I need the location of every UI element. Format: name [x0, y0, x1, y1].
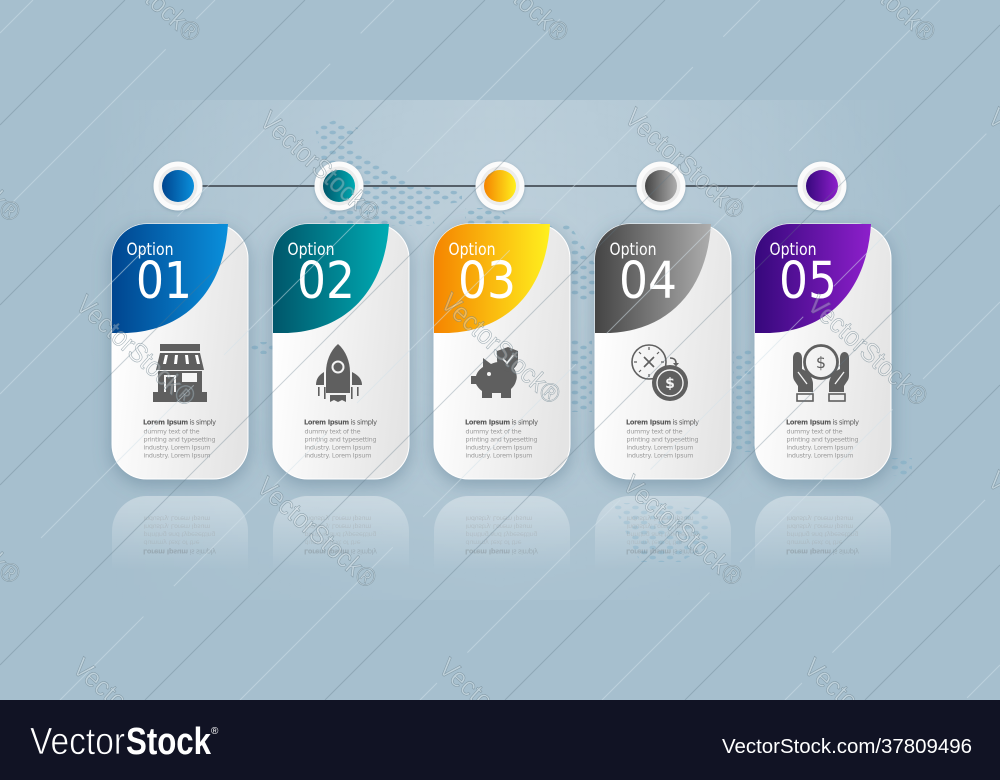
header: option 03 — [434, 224, 550, 333]
panel: option 04 — [595, 224, 731, 479]
text: option 01: printing and typesetting — [144, 436, 216, 444]
footer logo: Stock — [126, 721, 212, 763]
reflected text: printing and typesetting — [144, 530, 216, 538]
text: option 03: Lorem Ipsum is simply — [465, 418, 538, 426]
panel: option 03 — [434, 224, 570, 479]
reflected text: industry. Lorem Ipsum — [466, 522, 532, 530]
text: option 05: printing and typesetting — [786, 436, 858, 444]
text: option 02 — [304, 418, 377, 460]
reflected text — [143, 514, 859, 556]
text: option 01 — [143, 418, 216, 460]
label: option 02: Option — [288, 240, 334, 259]
reflected text: dummy text of the — [626, 538, 683, 546]
header: option 02 — [273, 224, 389, 333]
text: option 01: dummy text of the — [144, 428, 200, 436]
watermarks: VectorStock® — [70, 289, 202, 412]
footer logo — [30, 721, 219, 763]
reflected text: dummy text of the — [466, 538, 522, 546]
number: 03: 03 — [458, 252, 516, 311]
card reflections — [112, 496, 891, 570]
text: option 05: Lorem Ipsum is simply — [786, 418, 859, 426]
icon: store — [153, 344, 207, 402]
text: option 01: industry. Lorem Ipsum — [144, 444, 210, 452]
reflected text: Lorem Ipsum is simply — [304, 548, 377, 556]
timeline marker 5 — [798, 162, 846, 210]
world map dot pattern — [250, 120, 912, 562]
reflected text: Lorem Ipsum is simply — [786, 548, 859, 556]
timeline marker 1 — [154, 162, 202, 210]
reflected text: industry. Lorem Ipsum — [466, 514, 532, 522]
footer bar — [0, 700, 1000, 780]
number: 04: 04 — [619, 252, 677, 311]
text: option 03 — [465, 418, 538, 460]
label: option 04: Option — [610, 240, 656, 259]
reflected text: industry. Lorem Ipsum — [786, 514, 854, 522]
reflected text: Lorem Ipsum is simply — [143, 548, 216, 556]
reflected text: dummy text of the — [786, 538, 843, 546]
label: option 03: Option — [448, 240, 496, 259]
number: 02: 02 — [297, 252, 355, 311]
watermarks: VectorStock® — [435, 287, 567, 410]
text: option 02: printing and typesetting — [304, 436, 376, 444]
icon: rocket — [316, 344, 362, 402]
watermarks: VectorStock® — [802, 289, 934, 412]
reflected text: industry. Lorem Ipsum — [144, 514, 210, 522]
label: option 05: Option — [770, 240, 816, 259]
background — [197, 100, 803, 512]
text: option 02: industry. Lorem Ipsum — [304, 452, 372, 460]
text: option 05 — [786, 418, 859, 460]
timeline marker 4 — [636, 162, 686, 210]
text: option 05: industry. Lorem Ipsum — [786, 452, 854, 460]
timeline connector — [200, 185, 800, 187]
panel: option 02 — [273, 224, 409, 479]
reflected text: dummy text of the — [304, 538, 361, 546]
watermarks: VectorStock® — [251, 471, 383, 594]
panel: option 05 — [755, 224, 891, 479]
reflected text: dummy text of the — [144, 538, 200, 546]
text: option 01: industry. Lorem Ipsum — [144, 452, 210, 460]
panel: option 01 — [112, 224, 248, 479]
text: option 04: Lorem Ipsum is simply — [626, 418, 699, 426]
icon: clock and coin exchange: $ — [665, 376, 675, 392]
timeline marker 2 — [314, 162, 364, 210]
text: option 02: dummy text of the — [304, 428, 361, 436]
header: option 04 — [595, 224, 711, 333]
icon: hands holding coin — [793, 346, 849, 401]
text: option 03: printing and typesetting — [466, 436, 538, 444]
text: option 05: industry. Lorem Ipsum — [786, 444, 854, 452]
header: option 05 — [755, 224, 871, 333]
text: option 03: industry. Lorem Ipsum — [466, 444, 532, 452]
text: option 04: dummy text of the — [626, 428, 683, 436]
reflected text: printing and typesetting — [626, 530, 698, 538]
reflected text: industry. Lorem Ipsum — [626, 514, 694, 522]
text: option 05: dummy text of the — [786, 428, 843, 436]
icon: piggy bank with shield — [471, 347, 518, 398]
number: 05: 05 — [779, 252, 837, 311]
text: option 01: Lorem Ipsum is simply — [143, 418, 216, 426]
icon: clock and coin exchange — [632, 345, 688, 401]
text: option 04: industry. Lorem Ipsum — [626, 452, 694, 460]
text: option 04: industry. Lorem Ipsum — [626, 444, 694, 452]
reflected text: printing and typesetting — [304, 530, 376, 538]
text: option 02: Lorem Ipsum is simply — [304, 418, 377, 426]
watermarks: VectorStock® — [254, 105, 386, 228]
text: option 04: printing and typesetting — [626, 436, 698, 444]
reflected text: printing and typesetting — [466, 530, 538, 538]
number: 01: 01 — [136, 252, 192, 311]
reflected text: industry. Lorem Ipsum — [304, 522, 372, 530]
watermarks: VectorStock® — [617, 469, 749, 592]
reflected text: industry. Lorem Ipsum — [626, 522, 694, 530]
icon: hands holding coin: $ — [816, 353, 826, 372]
text: option 03: industry. Lorem Ipsum — [466, 452, 532, 460]
footer logo: Vector — [30, 721, 125, 763]
reflected text: industry. Lorem Ipsum — [786, 522, 854, 530]
footer image id: VectorStock.com/37809496 — [722, 736, 972, 758]
footer logo: ® — [211, 726, 219, 737]
text: option 03: dummy text of the — [466, 428, 522, 436]
reflected text: industry. Lorem Ipsum — [304, 514, 372, 522]
reflected text: Lorem Ipsum is simply — [465, 548, 538, 556]
text: option 04 — [626, 418, 699, 460]
header: option 01 — [112, 224, 228, 333]
reflected text: printing and typesetting — [786, 530, 858, 538]
reflected text: industry. Lorem Ipsum — [144, 522, 210, 530]
text: option 02: industry. Lorem Ipsum — [304, 444, 372, 452]
timeline marker 3 — [476, 162, 524, 210]
reflected text: Lorem Ipsum is simply — [626, 548, 699, 556]
label: option 01: Option — [126, 240, 174, 259]
watermarks: VectorStock® — [619, 102, 751, 225]
